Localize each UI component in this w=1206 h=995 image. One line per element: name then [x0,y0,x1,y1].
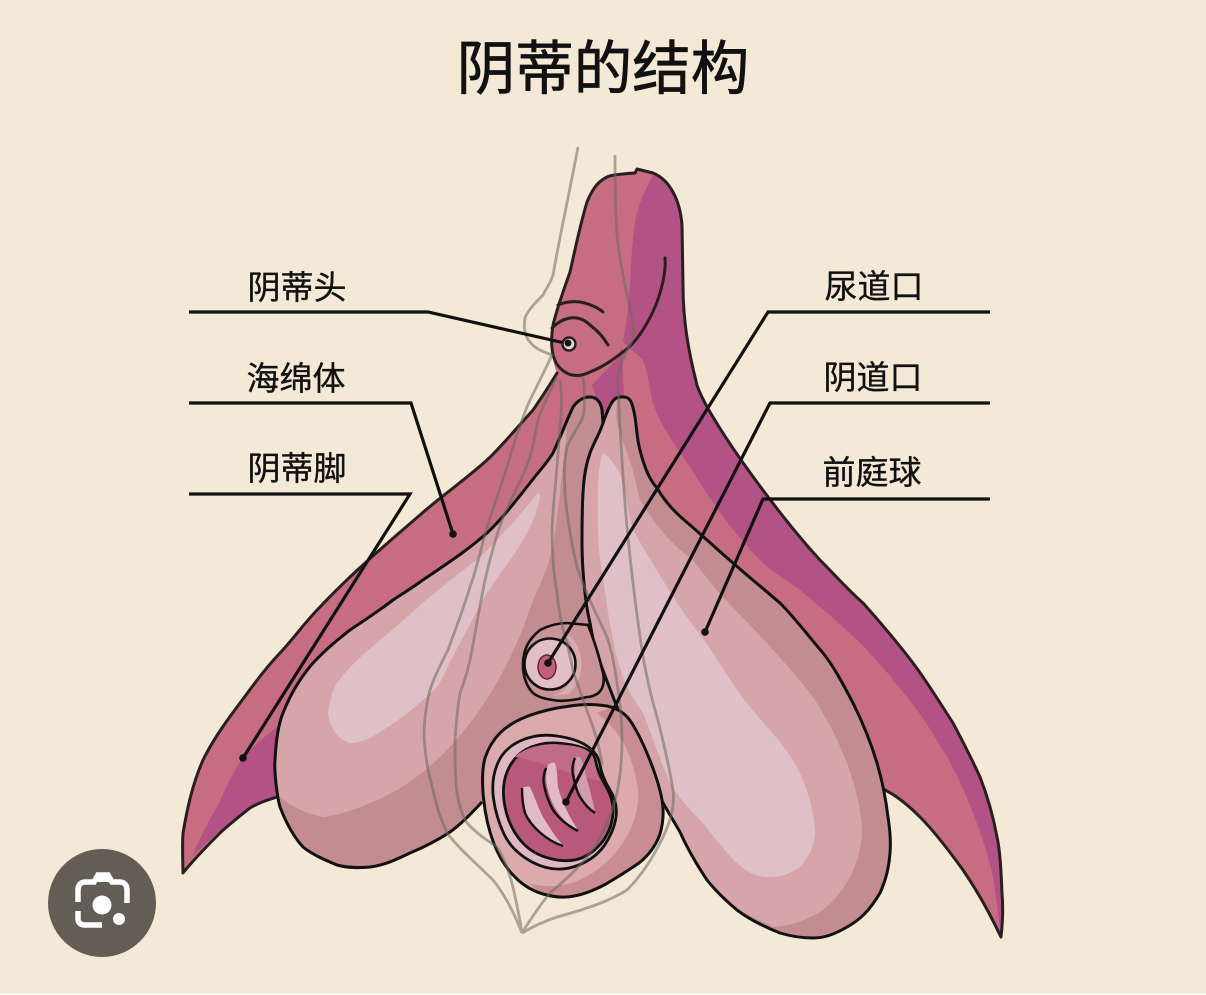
left vestibular bulb [275,397,617,868]
urethral opening tissue [523,623,604,701]
outline [582,397,890,938]
leader: 前庭球 [701,454,990,636]
light tone [328,493,540,743]
leader: 海绵体: 海绵体 [246,360,346,397]
ring [493,735,616,869]
light tone [598,453,815,877]
inner canal [503,743,613,861]
leader: 阴蒂脚 [189,450,410,762]
crescent shadow [530,707,662,897]
folds [522,786,563,845]
leader: 尿道口 [544,268,990,667]
leader: 海绵体 [189,360,457,538]
dark shading: right side [623,175,1003,937]
body and crura [183,169,1003,937]
leader: 阴蒂脚: 阴蒂脚 [248,450,346,487]
leader: 阴蒂头 [189,269,576,350]
icon: camera search button [48,849,156,957]
leader: 尿道口: 尿道口 [824,268,924,305]
title: 阴蒂的结构 [457,37,749,102]
vaginal opening tissue [483,704,663,897]
leader: 前庭球: 前庭球 [822,454,922,491]
labia outline in grey [424,147,673,933]
leader: 阴蒂头: 阴蒂头 [248,269,346,306]
right vestibular bulb [581,397,890,938]
leader: 阴道口 [562,359,990,806]
mid tone [275,427,567,817]
dark shading: under glans [592,345,624,418]
glans and body outline [183,169,1003,937]
anatomical diagram [183,147,1003,938]
dark shading: left tip [192,723,282,857]
leader: 阴道口: 阴道口 [824,359,922,396]
outline [275,397,603,868]
mid tone [581,398,862,927]
